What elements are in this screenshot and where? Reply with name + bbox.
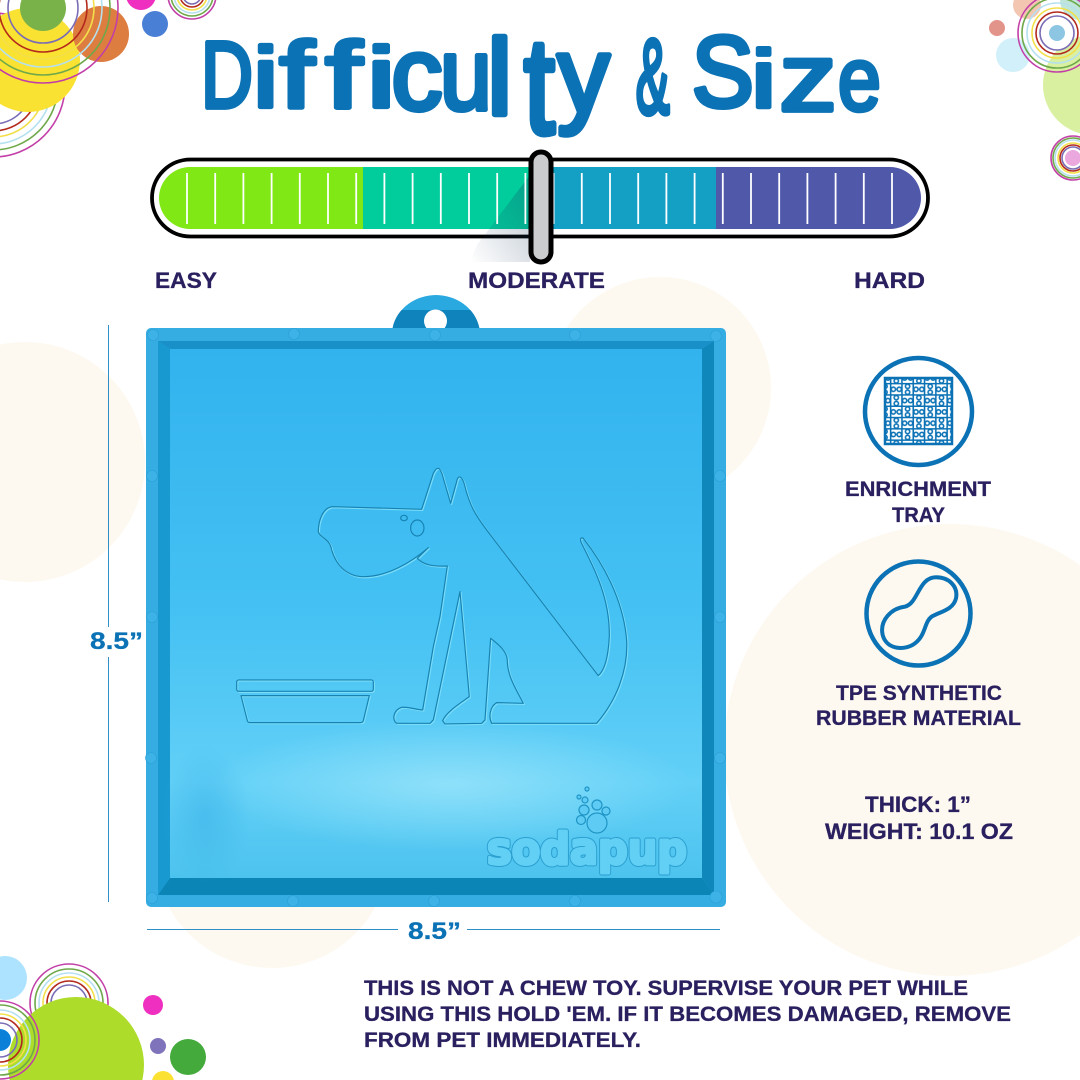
warning text: USING THIS HOLD 'EM. IF IT BECOMES DAMAGED, REMOVE bbox=[364, 1003, 1011, 1026]
title: i bbox=[253, 31, 278, 126]
meter shadow bbox=[470, 175, 530, 262]
sodapup logo: sodapup bbox=[487, 824, 687, 875]
sodapup logo: sodapup bbox=[487, 824, 687, 875]
title: u bbox=[440, 18, 492, 131]
meter slider bbox=[531, 152, 551, 262]
tray floor bbox=[170, 349, 702, 878]
title: f bbox=[280, 23, 315, 128]
label: moderate: MODERATE bbox=[468, 268, 605, 293]
label: enrichment tray: TRAY bbox=[892, 504, 945, 527]
icon: puzzle tray bbox=[865, 358, 972, 465]
title: & bbox=[636, 16, 670, 136]
label: enrichment tray bbox=[845, 478, 991, 527]
dimension: width: 8.5” bbox=[408, 918, 461, 945]
title: y bbox=[558, 14, 610, 136]
title: S bbox=[692, 15, 754, 128]
title: i bbox=[367, 31, 395, 126]
title: z bbox=[780, 25, 837, 132]
tray hanger bbox=[392, 295, 480, 328]
meter ticks bbox=[187, 173, 892, 224]
decoration: bottom-left circles bbox=[0, 956, 206, 1080]
tray rim bbox=[146, 328, 726, 907]
label: rubber material: RUBBER MATERIAL bbox=[816, 707, 1021, 730]
title: f bbox=[326, 23, 362, 128]
title: i bbox=[751, 34, 776, 125]
title: c bbox=[392, 16, 442, 132]
title: D bbox=[201, 22, 253, 128]
warning text: THIS IS NOT A CHEW TOY. SUPERVISE YOUR PET WHILE bbox=[364, 977, 968, 1000]
warning text bbox=[364, 977, 1011, 1052]
product: enrichment tray bbox=[146, 280, 726, 907]
label: rubber material bbox=[816, 682, 1021, 730]
background cream circles bbox=[0, 277, 1080, 976]
title: t bbox=[524, 11, 555, 163]
label: thickness and weight bbox=[825, 792, 1013, 844]
dimension: height: 8.5” bbox=[90, 628, 143, 655]
meter track bbox=[152, 160, 928, 236]
label: hard: HARD bbox=[854, 268, 925, 293]
icon: peanut rubber material bbox=[866, 562, 970, 666]
title bbox=[201, 11, 881, 163]
sodapup logo bbox=[487, 787, 687, 875]
title: e bbox=[838, 28, 881, 129]
warning text: FROM PET IMMEDIATELY. bbox=[364, 1029, 641, 1052]
tray inner walls bbox=[158, 341, 714, 349]
label: thickness and weight: WEIGHT: 10.1 OZ bbox=[825, 819, 1013, 844]
difficulty meter bbox=[152, 152, 928, 262]
decoration: top-right circles bbox=[989, 0, 1080, 180]
label: enrichment tray: ENRICHMENT bbox=[845, 478, 991, 501]
title: l bbox=[487, 16, 512, 138]
label: thickness and weight: THICK: 1” bbox=[865, 792, 971, 817]
embossed dog and bowl bbox=[237, 468, 628, 725]
label: rubber material: TPE SYNTHETIC bbox=[836, 682, 1002, 705]
tray rim bumps bbox=[146, 328, 726, 906]
label: easy: EASY bbox=[155, 268, 217, 293]
meter segments bbox=[159, 167, 921, 229]
decoration: top-left circles bbox=[0, 0, 216, 157]
